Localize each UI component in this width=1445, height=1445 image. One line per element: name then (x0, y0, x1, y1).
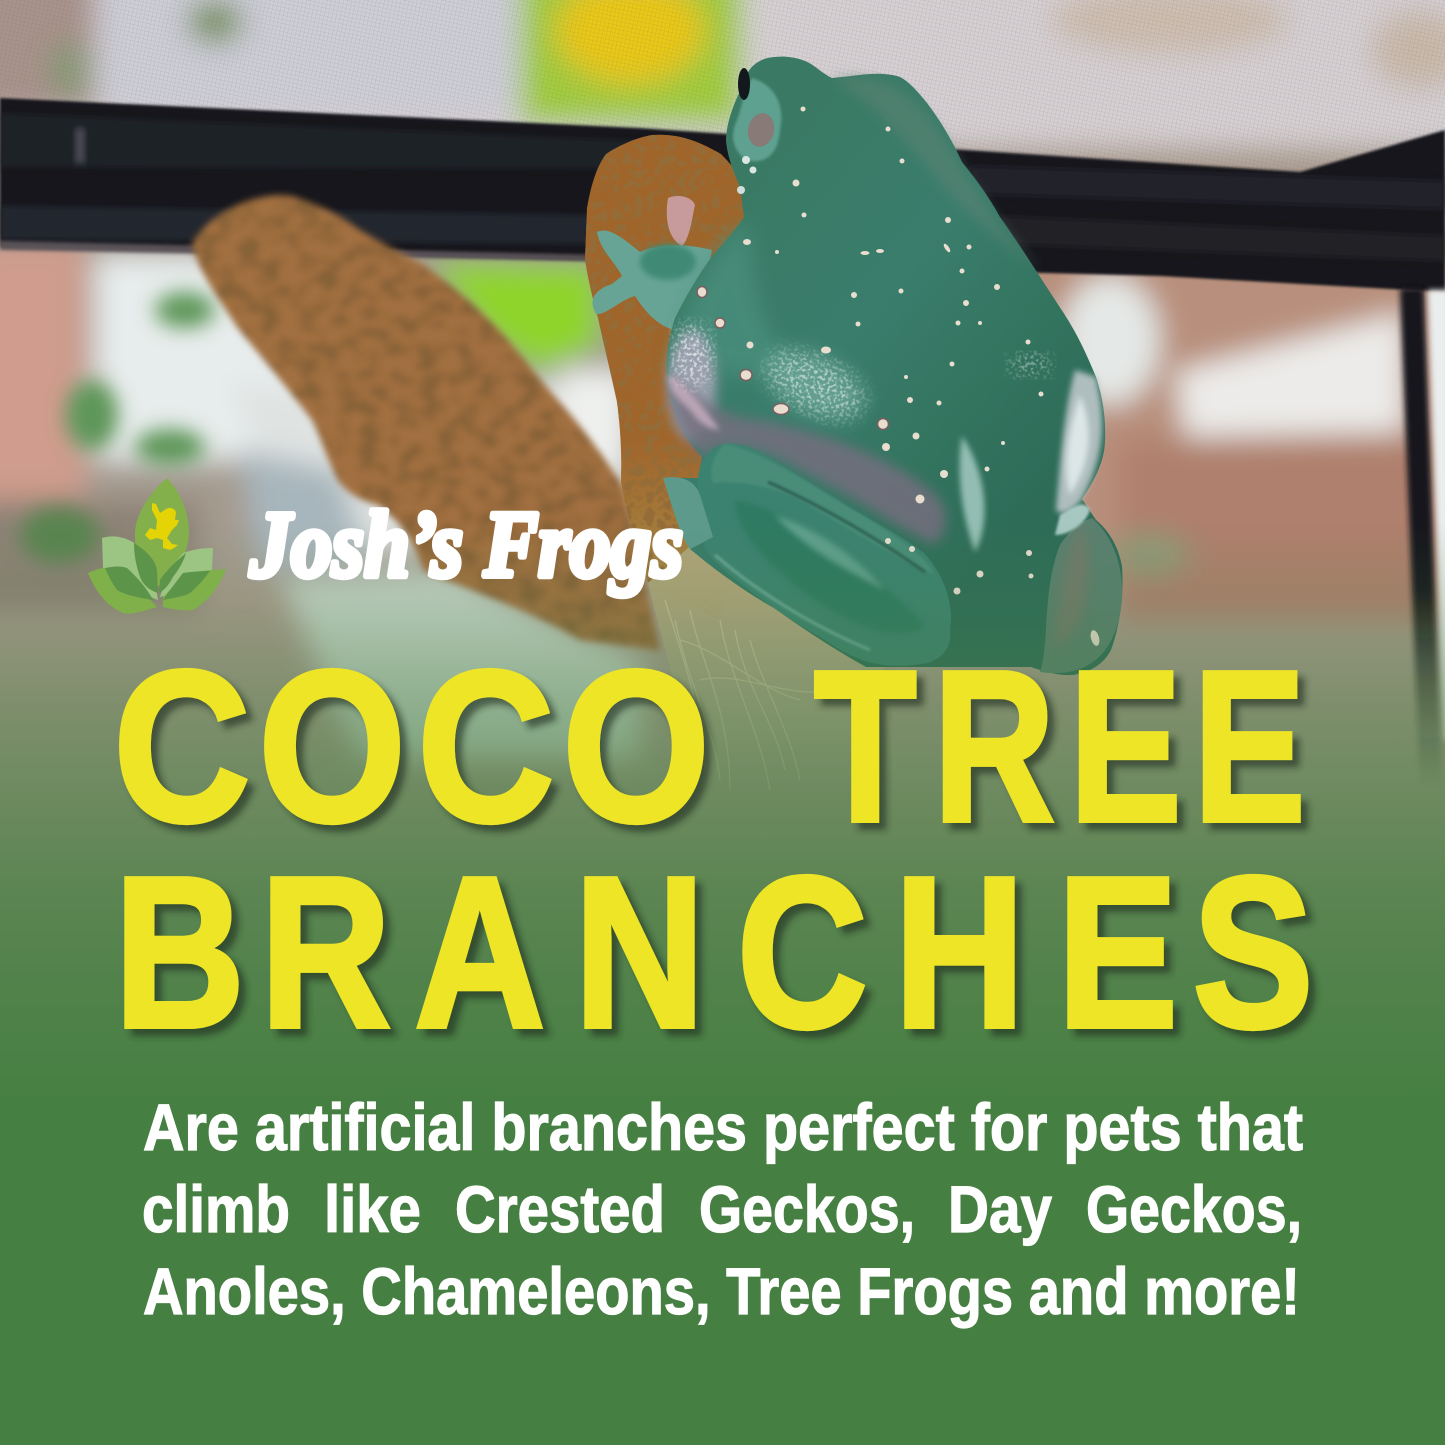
description text (142, 1090, 1303, 1328)
frog back shading (832, 77, 1040, 270)
tank corner post (1400, 288, 1442, 790)
coco straw base (648, 520, 900, 790)
left background wall (0, 240, 670, 760)
right background wall (1000, 250, 1445, 620)
frog lilac belly (668, 375, 946, 545)
description text: Crested (455, 1172, 665, 1246)
title (114, 625, 1313, 1073)
logo wordmark (249, 493, 683, 597)
title line one: TREE (814, 625, 1305, 866)
frog white spots (697, 106, 1101, 647)
frog flank teal light (672, 220, 790, 376)
logo leaf mark (88, 478, 226, 614)
description text: Geckos, (1086, 1172, 1302, 1246)
title line two: BRANCHES (114, 833, 1313, 1073)
description text: like (324, 1172, 421, 1246)
title line one (114, 625, 1305, 866)
description text: Are artificial branches perfect for pets that (143, 1090, 1303, 1164)
description text: Day (948, 1172, 1052, 1246)
frog (593, 57, 1123, 675)
coco branch left (192, 195, 660, 650)
description text: Geckos, (699, 1172, 915, 1246)
frog body (663, 57, 1123, 675)
blurred leaves (20, 292, 215, 563)
frog rear foot (1040, 518, 1122, 673)
frog textured highlights (673, 323, 713, 387)
logo frog silhouette (145, 503, 179, 550)
frog hind leg (663, 444, 951, 666)
logo wordmark: Josh’s (249, 493, 463, 597)
black frame bar (0, 98, 1445, 292)
description text: climb (142, 1172, 290, 1246)
logo wordmark: Frogs (483, 493, 683, 597)
coco branch right (585, 135, 760, 620)
logo (88, 478, 683, 614)
title line one: COCO (114, 626, 710, 866)
frog head ridge and eye (733, 68, 781, 194)
frog flank lavender (668, 330, 716, 440)
blurred mesh lid (0, 0, 1445, 150)
frog front foot (593, 196, 712, 330)
